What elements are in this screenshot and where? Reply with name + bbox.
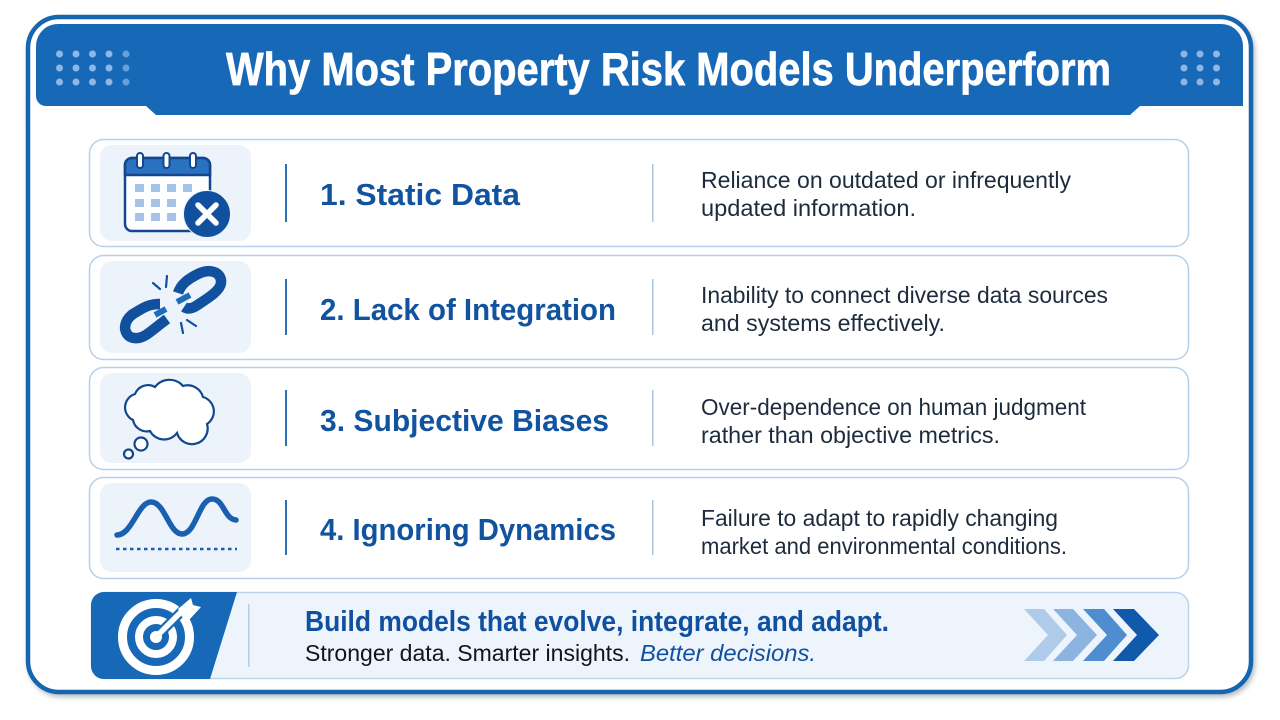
icon: calendar with x [125,153,230,238]
text: subjective biases description: rather than objective metrics. [701,422,1000,448]
heading: lack of integration: 2. Lack of Integration [320,292,616,327]
panel: 4. ignoring dynamics [90,478,1188,578]
text: lack of integration description: and systems effectively. [701,310,945,336]
callout banner [91,592,1188,679]
text: ignoring dynamics description: Failure to adapt to rapidly changing [701,505,1058,531]
callout subtext: Better decisions. [640,640,816,666]
callout subtext [305,640,816,666]
text: lack of integration description: Inability to connect diverse data sources [701,282,1108,308]
text: static data description: Reliance on outdated or infrequently [701,167,1071,193]
text: static data description [701,167,1071,221]
header dots left [56,50,130,86]
panel: 3. subjective biases [90,368,1188,470]
header banner [36,24,1243,115]
panel: 1. static data [90,140,1188,246]
callout subtext: Stronger data. Smarter insights. [305,640,630,666]
header dots right [1180,50,1220,86]
icon: wave with dotted baseline [116,499,237,549]
text: lack of integration description [701,282,1108,336]
heading: static data: 1. Static Data [320,177,521,212]
icon: thought bubble [124,380,214,458]
text: subjective biases description [701,394,1087,448]
icon: target with arrow [122,598,201,670]
arrows: chevrons [1024,609,1159,661]
text: subjective biases description: Over-dependence on human judgment [701,394,1087,420]
text: static data description: updated information. [701,195,916,221]
title: Why Most Property Risk Models Underperform [226,43,1111,95]
text: ignoring dynamics description: market and environmental conditions. [701,533,1067,559]
heading: ignoring dynamics: 4. Ignoring Dynamics [320,512,616,547]
icon: broken chain [125,271,221,338]
heading: subjective biases: 3. Subjective Biases [320,403,609,438]
panel: 2. lack of integration [90,256,1188,360]
callout heading: Build models that evolve, integrate, and adapt. [305,606,889,638]
text: ignoring dynamics description [701,505,1067,559]
